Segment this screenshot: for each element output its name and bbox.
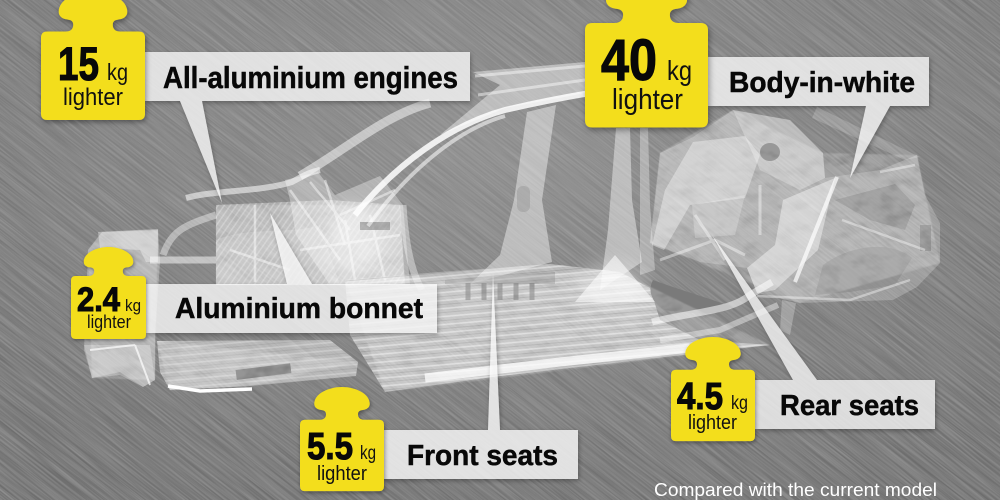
weight: 2.4 kg lighter: 2.4 [77, 281, 120, 319]
weight: 2.4 kg lighter [71, 247, 146, 339]
weight: 2.4 kg lighter: kg [125, 296, 141, 315]
front rail and wheel arch [150, 170, 320, 260]
rear side frame [652, 107, 920, 260]
floor pan [345, 255, 770, 392]
engine bay [216, 172, 410, 285]
weight: 5.5 kg lighter: 5.5 [307, 426, 353, 468]
mottled surface detail [88, 110, 940, 392]
C pillar strips [600, 128, 655, 290]
B pillar [470, 105, 556, 284]
front floor plate [157, 340, 358, 391]
car body structure x-ray [84, 62, 940, 392]
front bumper [84, 229, 158, 387]
label: front seats: Front seats [407, 440, 558, 472]
weight: 4.5 kg lighter: 4.5 [677, 376, 723, 418]
weight: 5.5 kg lighter: lighter [317, 463, 367, 485]
weight: 15 kg lighter: 15 [58, 37, 99, 90]
weight: 40 kg lighter: lighter [612, 84, 683, 116]
weight: 40 kg lighter: 40 [601, 28, 657, 93]
label: rear seats: Rear seats [780, 390, 919, 422]
weight: 40 kg lighter [585, 0, 708, 128]
label: aluminium bonnet: Aluminium bonnet [175, 293, 423, 325]
weight: 4.5 kg lighter: kg [731, 393, 748, 414]
roof rail [440, 62, 585, 135]
soft base layer of the structure [84, 110, 940, 392]
weight: 2.4 kg lighter: lighter [87, 312, 131, 332]
weight: 4.5 kg lighter [671, 337, 755, 441]
label: body-in-white [708, 57, 929, 178]
rear quarter and boot [747, 165, 931, 300]
label: all-aluminium engines [145, 52, 470, 203]
label: rear seats [712, 235, 935, 429]
weight: 5.5 kg lighter: kg [360, 443, 376, 464]
footnote: Compared with the current model [654, 480, 937, 500]
weight: 40 kg lighter: kg [667, 55, 692, 86]
rear wheel well dark cut [651, 280, 796, 340]
windscreen pillar arcs [300, 93, 590, 290]
label: all-aluminium engines: All-aluminium engines [163, 60, 458, 95]
label: body-in-white: Body-in-white [729, 67, 915, 99]
weight: 15 kg lighter: lighter [63, 84, 123, 111]
weight: 15 kg lighter [41, 0, 145, 120]
weight: 4.5 kg lighter: lighter [688, 412, 737, 434]
weight: 15 kg lighter: kg [107, 59, 128, 85]
weight: 5.5 kg lighter [300, 387, 384, 491]
label: front seats [384, 273, 578, 479]
label: aluminium bonnet [146, 213, 437, 333]
